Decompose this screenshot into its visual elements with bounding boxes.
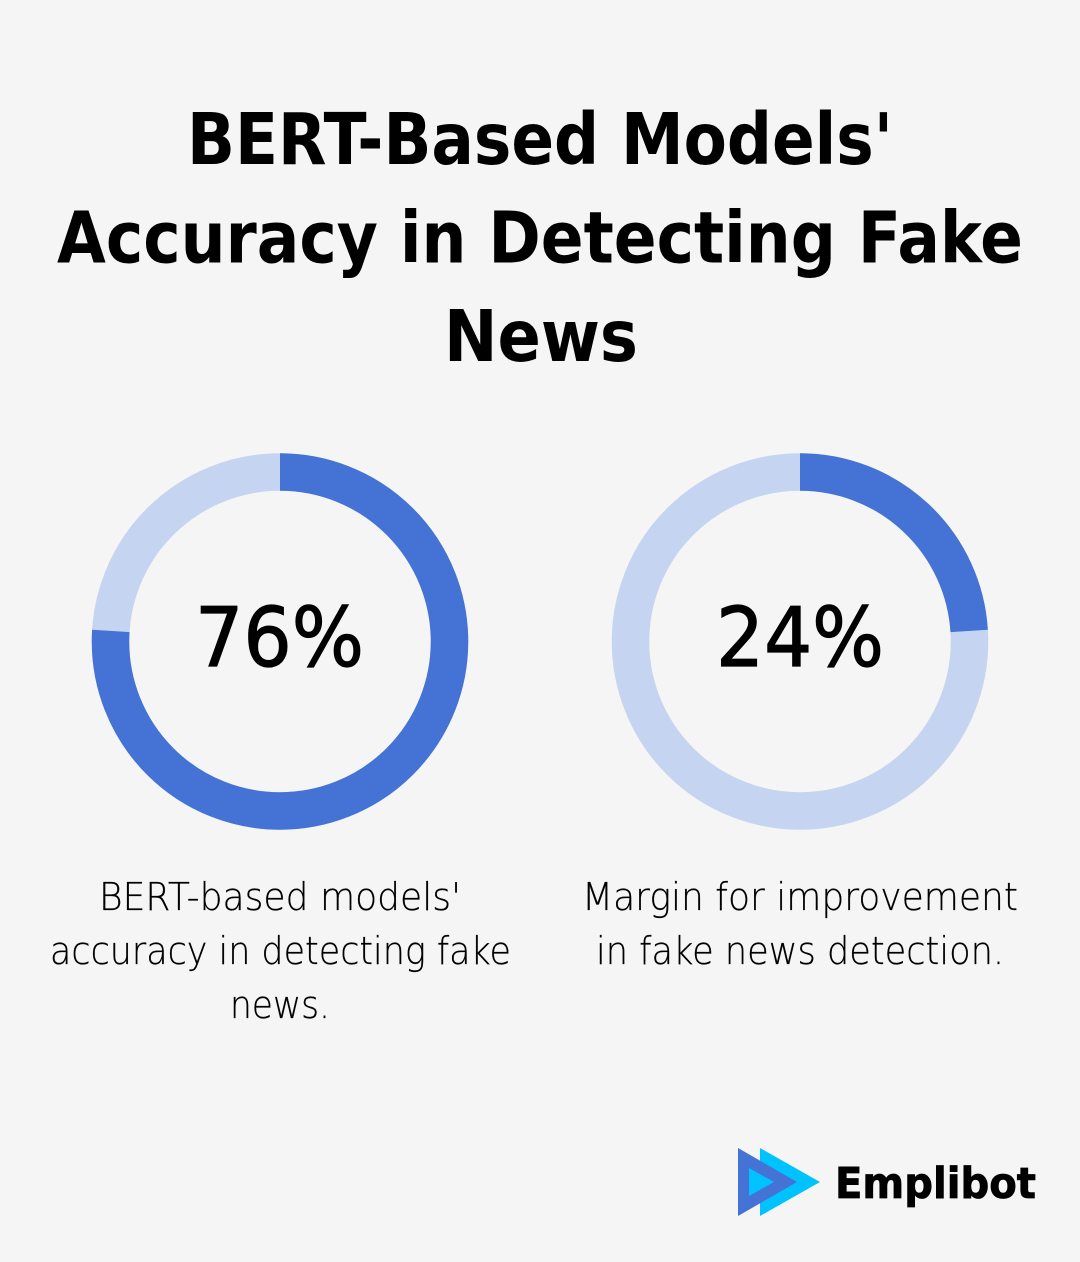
- icon: play triangles: [738, 1148, 820, 1216]
- panel: 76% accuracy: [50, 472, 511, 1028]
- caption: BERT accuracy: accuracy in detecting fake: [50, 929, 511, 974]
- value: 24%: 24%: [716, 591, 884, 686]
- value: 76%: 76%: [195, 591, 364, 686]
- caption: BERT accuracy: news.: [230, 983, 330, 1028]
- caption: margin for improvement: in fake news detection.: [596, 929, 1004, 974]
- caption: BERT accuracy: [50, 875, 511, 1028]
- caption: margin for improvement: [582, 875, 1018, 974]
- logo: Emplibot: [738, 1148, 1036, 1216]
- caption: BERT accuracy: BERT-based models': [99, 875, 461, 920]
- caption: margin for improvement: Margin for improvement: [582, 875, 1018, 920]
- donut chart: 76%: [110, 472, 450, 811]
- title: [57, 98, 1023, 378]
- title: News: [444, 295, 638, 378]
- wordmark: Emplibot: [835, 1160, 1036, 1209]
- panel: 24% margin: [582, 472, 1018, 974]
- title: BERT-Based Models': [187, 98, 893, 181]
- donut chart: 24%: [630, 472, 970, 811]
